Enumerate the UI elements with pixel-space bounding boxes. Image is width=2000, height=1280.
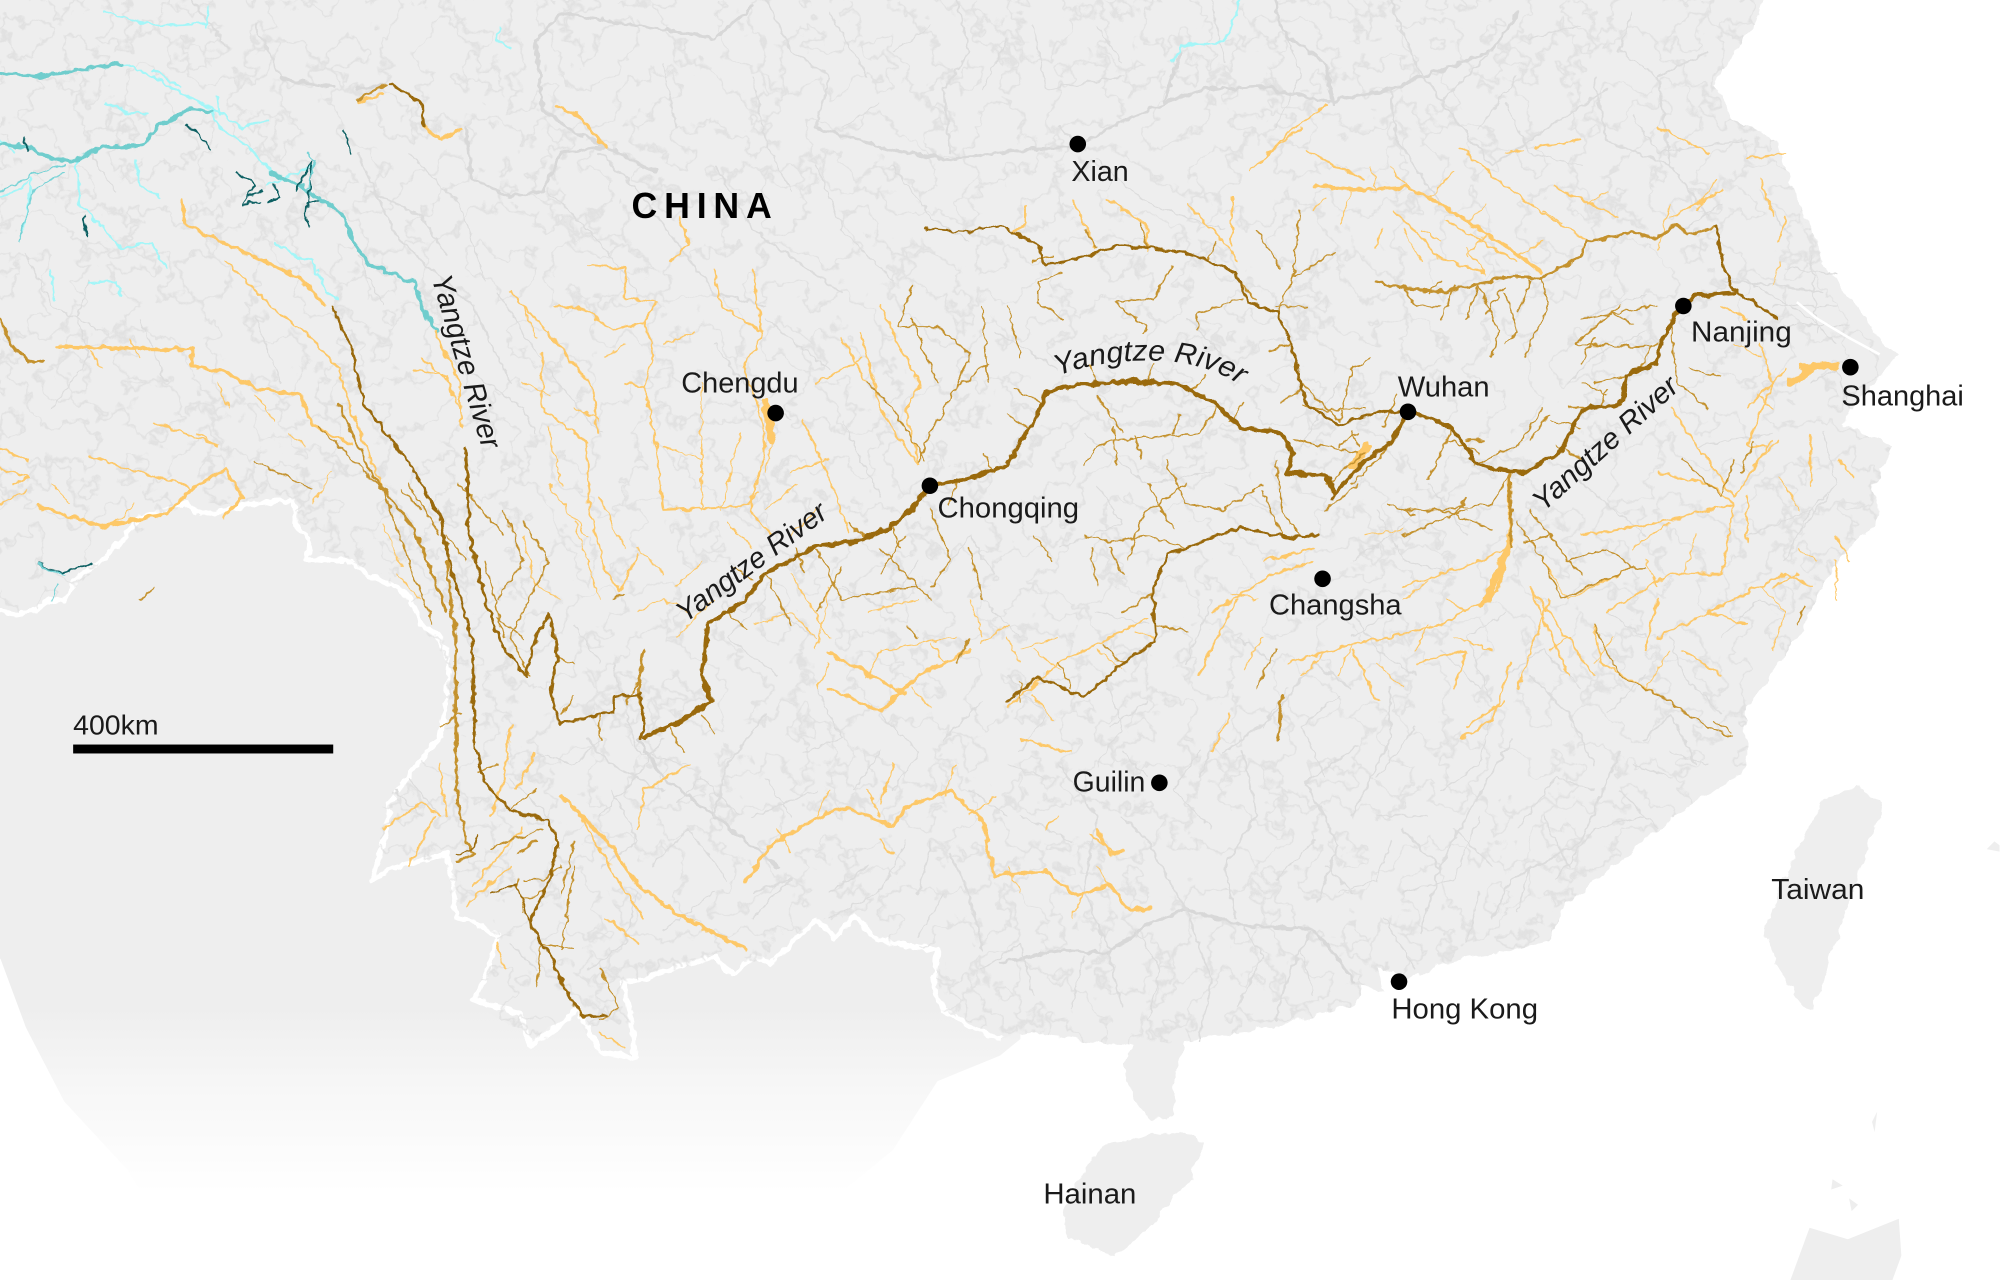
rivers: light orange tributaries xyxy=(0,94,1855,1048)
china border xyxy=(0,500,1001,1058)
city: Nanjing xyxy=(1675,298,1792,349)
city: Nanjing: Nanjing xyxy=(1691,317,1792,349)
rivers: cyan and teal headwaters xyxy=(0,0,1240,599)
city: Changsha: Changsha xyxy=(1269,590,1402,622)
label: Hainan: Hainan xyxy=(1043,1179,1136,1211)
river mesh texture xyxy=(0,0,1890,1044)
city: Wuhan: Wuhan xyxy=(1398,371,1490,403)
city: Chongqing: Chongqing xyxy=(938,493,1079,525)
label: Yangtze River (lower): Yangtze River xyxy=(1526,369,1686,518)
label: Yangtze River (upper): Yangtze River xyxy=(425,271,508,453)
label: Taiwan: Taiwan xyxy=(1771,874,1864,906)
city: Wuhan xyxy=(1398,371,1490,420)
estuary channel near Shanghai xyxy=(1797,302,1880,354)
city: Hong Kong xyxy=(1391,973,1538,1026)
rivers: medium brown tributaries xyxy=(0,84,1804,1020)
scale bar: 400km xyxy=(73,709,333,753)
land: neighbouring countries fading out to the south xyxy=(0,0,1020,1192)
label: Yangtze River (middle): Yangtze River xyxy=(1054,342,1249,382)
city: Shanghai xyxy=(1841,359,1964,412)
river network: minor rivers (grey) xyxy=(26,0,1849,1039)
city: Chengdu xyxy=(681,368,799,421)
city: Changsha xyxy=(1269,571,1402,622)
city: Guilin: Guilin xyxy=(1073,767,1145,799)
city: Xian xyxy=(1069,136,1129,188)
city: Xian: Xian xyxy=(1071,156,1129,188)
city: Chengdu: Chengdu xyxy=(681,368,799,400)
Yangtze main stem xyxy=(929,293,1733,497)
label: CHINA: CHINA xyxy=(632,186,772,226)
label: Yangtze River (Sichuan): Yangtze River xyxy=(670,495,835,629)
land: Taiwan xyxy=(1765,785,1882,1010)
land: Hainan xyxy=(1064,1133,1204,1256)
scale bar: 400km: 400km xyxy=(73,709,159,740)
land: northern Philippines xyxy=(1790,841,2000,1280)
city: Chongqing xyxy=(922,477,1079,525)
rivers: dark main stems of the Yangtze basin xyxy=(332,84,1778,1017)
city: Hong Kong: Hong Kong xyxy=(1391,994,1538,1026)
city: Shanghai: Shanghai xyxy=(1841,380,1964,412)
